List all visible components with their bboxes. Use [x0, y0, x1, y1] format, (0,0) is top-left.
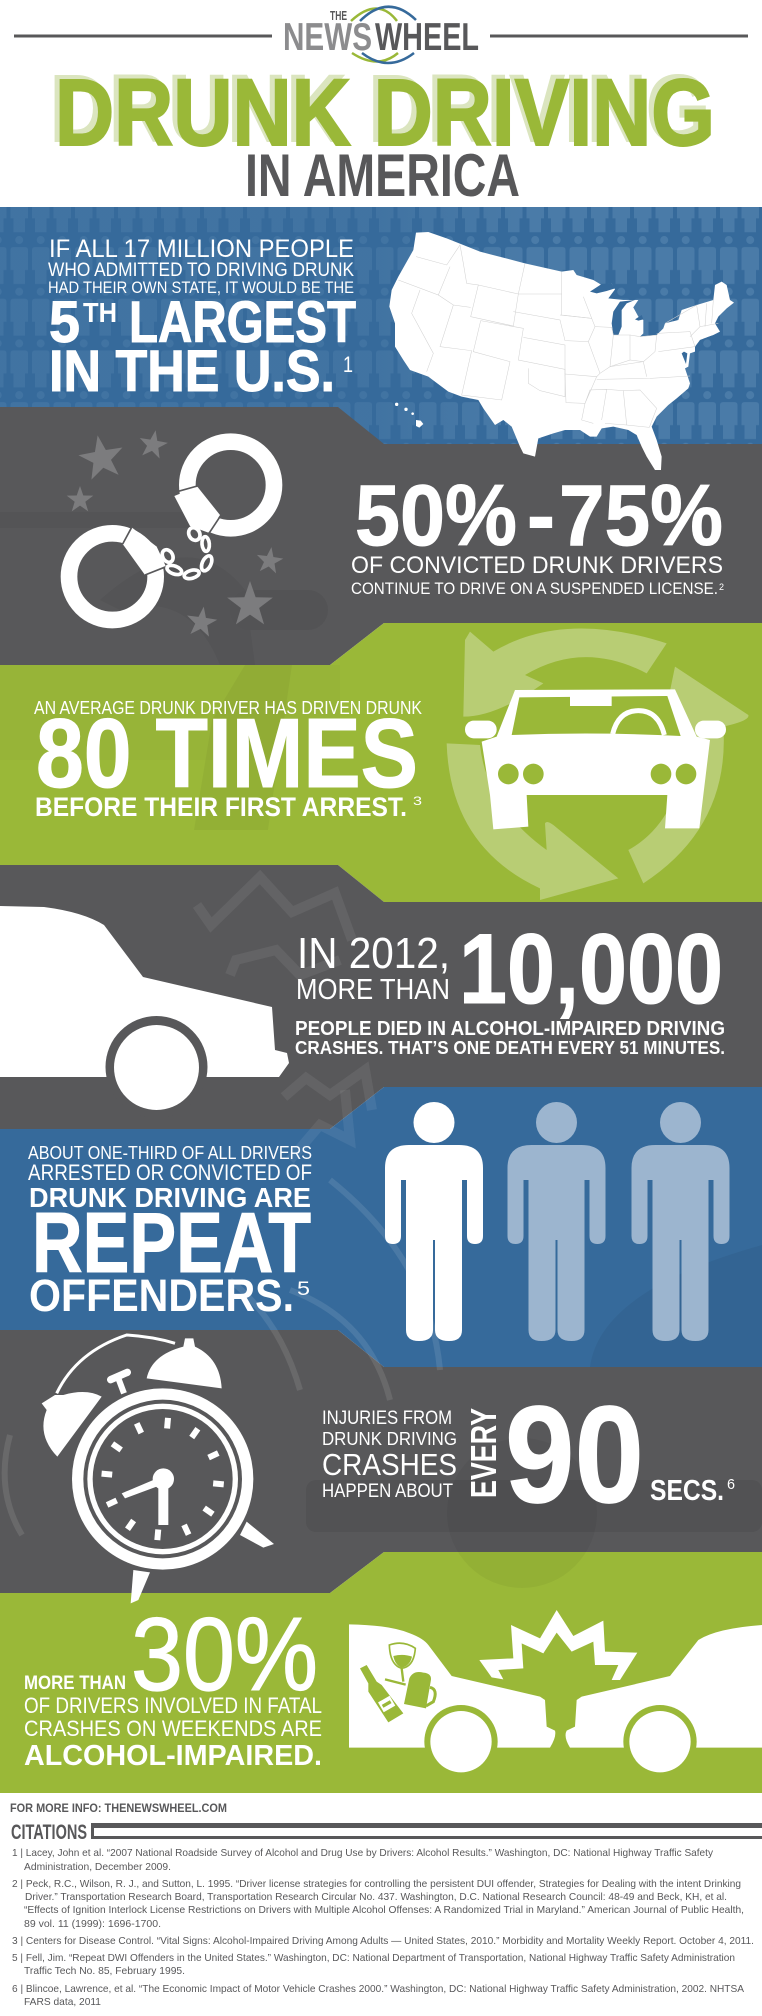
text block: suspended license statistic: 75% [559, 468, 723, 564]
text block: repeat offenders [28, 1142, 312, 1321]
icon: second person [508, 1102, 606, 1341]
text block: 80 times: BEFORE THEIR FIRST ARREST. [35, 792, 407, 822]
text block: state statistic [48, 235, 356, 404]
icon: alarm clock [42, 1335, 274, 1603]
text block: suspended license statistic: 2 [719, 582, 724, 592]
panel: blue repeat offenders background [0, 1087, 762, 1367]
text block: citation list: 5 | Fell, Jim. “Repeat DWI Offenders in the United States.” Washington, DC: National Department of Transportation, National Highway Traffic Safety Administration [12, 1952, 735, 1964]
text block: injuries every 90 seconds: HAPPEN ABOUT [322, 1481, 453, 1502]
heading: citations: CITATIONS [11, 1821, 87, 1844]
text block: injuries every 90 seconds [322, 1378, 735, 1532]
text block: citation list: 2 | Peck, R.C., Wilson, R. J., and Sutton, L. 1995. “Driver license strategies for controlling the persistent DUI offender, Strategies for Dealing with the intent Drinking [12, 1878, 741, 1890]
text block: state statistic: WHO ADMITTED TO DRIVING DRUNK [48, 260, 354, 281]
panel: green average driver background [0, 623, 762, 902]
text block: repeat offenders: REPEAT [32, 1196, 311, 1291]
header: The News Wheel logo: THE [330, 8, 347, 23]
text block: suspended license statistic: 50% [355, 468, 517, 564]
text block: 10,000 deaths: 10,000 [459, 913, 723, 1024]
decoration: ghost alarm ringing arcs [5, 1180, 440, 1535]
icon: three people, one highlighted [385, 1102, 730, 1341]
text block: repeat offenders: OFFENDERS. [29, 1270, 294, 1321]
panel: blue state statistic background [0, 207, 762, 447]
text block: state statistic: HAD THEIR OWN STATE, IT WOULD BE THE [48, 278, 354, 297]
text block: citation list: FARS data, 2011 [24, 1996, 101, 2008]
text block: 10,000 deaths: IN 2012, [297, 929, 450, 978]
icon: handcuffs [69, 442, 274, 620]
text block: suspended license statistic [351, 468, 724, 598]
text block: injuries every 90 seconds: EVERY [463, 1408, 504, 1498]
decoration: ghost crash bursts [197, 877, 372, 1160]
text block: state statistic: IF ALL 17 MILLION PEOPLE [49, 235, 354, 263]
text block: 30 percent [24, 1597, 322, 1772]
icon: right car [566, 1625, 762, 1778]
text block: state statistic: IN THE U.S. [49, 339, 335, 404]
text block: 30 percent: OF DRIVERS INVOLVED IN FATAL [24, 1693, 322, 1718]
icon: recycling arrows [447, 629, 748, 900]
text block: 30 percent: ALCOHOL-IMPAIRED. [24, 1740, 322, 1772]
text block: 80 times: 80 TIMES [36, 698, 418, 808]
icon: crash burst [479, 1610, 637, 1680]
text block: citation list: “Effects of Ignition Interlock License Restrictions on Drivers with Multiple Alcohol Offenses: A Randomized Trial in Maryland.” American Journal of Public Health, [24, 1904, 744, 1916]
icon: front view of car [465, 689, 726, 829]
icon: stars [67, 428, 285, 637]
header: The News Wheel logo: WHEEL [375, 16, 479, 59]
footer: more info link: FOR MORE INFO: THENEWSWHEEL.COM [10, 1801, 227, 1815]
text block: repeat offenders: DRUNK DRIVING ARE [29, 1182, 311, 1213]
text block: citation list: Administration, December 2009. [24, 1861, 171, 1873]
text block: suspended license statistic: - [527, 468, 555, 564]
header: The News Wheel logo: NEWS [283, 16, 372, 59]
text block: citation list: Traffic Tech No. 85, February 1995. [24, 1965, 185, 1977]
text block: state statistic: TH [83, 297, 117, 328]
text block: injuries every 90 seconds: CRASHES [322, 1447, 457, 1482]
text block: suspended license statistic: OF CONVICTED DRUNK DRIVERS [351, 552, 723, 579]
subtitle: In America: IN AMERICA [245, 142, 520, 209]
decoration: ghost wheel across gray and green panels [447, 1438, 597, 1588]
panel: green weekend crashes background [0, 1552, 762, 1793]
text block: repeat offenders: ARRESTED OR CONVICTED OF [28, 1160, 312, 1185]
icon: bottle, wine glass and beer mug [360, 1643, 435, 1722]
icon: side view of car [0, 906, 289, 1118]
text block: injuries every 90 seconds: DRUNK DRIVING [322, 1429, 457, 1449]
text block: injuries every 90 seconds: 90 [505, 1378, 644, 1532]
text block: citation list [12, 1847, 754, 2008]
text block: state statistic: 5 [49, 290, 80, 355]
text block: 30 percent: MORE THAN [24, 1673, 126, 1694]
text block: state statistic: LARGEST [129, 290, 356, 355]
text block: repeat offenders: 5 [297, 1279, 310, 1300]
text block: citation list: 6 | Blincoe, Lawrence, et al. “The Economic Impact of Motor Vehicle Crashes 2000.” Washington, DC: National Highway Traffic Safety Administration, 2002. NHTSA [12, 1983, 744, 1995]
text block: citation list: 3 | Centers for Disease Control. “Vital Signs: Alcohol-Impaired Driving Among Adults — United States, 2010.” Morbidity and Mortality Weekly Report. October 4, 2011. [12, 1935, 754, 1947]
text block: injuries every 90 seconds: INJURIES FROM [322, 1408, 452, 1429]
panel: gray injuries background [0, 1330, 762, 1593]
icon: two cars crashing with drinks [349, 1610, 762, 1778]
icon: recycling arrows around front view of car [447, 629, 748, 900]
text block: 30 percent: 30% [131, 1597, 318, 1713]
icon: map of the United States [389, 232, 734, 470]
text block: 80 times: 3 [413, 794, 422, 808]
text block: suspended license statistic: CONTINUE TO DRIVE ON A SUSPENDED LICENSE. [351, 579, 718, 598]
text block: 10,000 deaths [295, 913, 725, 1058]
text block: 80 times: AN AVERAGE DRUNK DRIVER HAS DRIVEN DRUNK [34, 698, 422, 718]
text block: state statistic: 1 [343, 352, 353, 377]
text block: repeat offenders: ABOUT ONE-THIRD OF ALL DRIVERS [28, 1142, 312, 1163]
icon: highlighted person [385, 1102, 483, 1341]
icon: third person [632, 1102, 730, 1341]
text block: 10,000 deaths: CRASHES. THAT’S ONE DEATH EVERY 51 MINUTES. [295, 1038, 725, 1058]
icon: left car [349, 1624, 555, 1778]
heading: citations [11, 1821, 762, 1844]
text block: citation list: Driver.” Transportation Research Board, Transportation Research Circular No. 437. Washington, D.C. National Research Council: 48-49 and Beck, KH, et al. [25, 1891, 727, 1903]
panel: gray fatalities background [0, 865, 762, 1129]
panel: gray handcuffs background [0, 407, 762, 665]
text block: citation list: 89 vol. 11 (1999): 1696-1700. [24, 1918, 161, 1930]
text block: 10,000 deaths: MORE THAN [296, 974, 450, 1006]
text block: 30 percent: CRASHES ON WEEKENDS ARE [24, 1716, 322, 1741]
text block: citation list: 1 | Lacey, John et al. “2007 National Roadside Survey of Alcohol and Drug Use by Drivers: Alcohol Results.” Washington, DC: National Highway Traffic Safety [12, 1847, 714, 1859]
text block: 10,000 deaths: PEOPLE DIED IN ALCOHOL-IMPAIRED DRIVING [295, 1018, 725, 1040]
text block: injuries every 90 seconds: 6 [727, 1476, 735, 1493]
header: The News Wheel logo [14, 7, 748, 63]
text block: injuries every 90 seconds: SECS. [650, 1475, 724, 1507]
